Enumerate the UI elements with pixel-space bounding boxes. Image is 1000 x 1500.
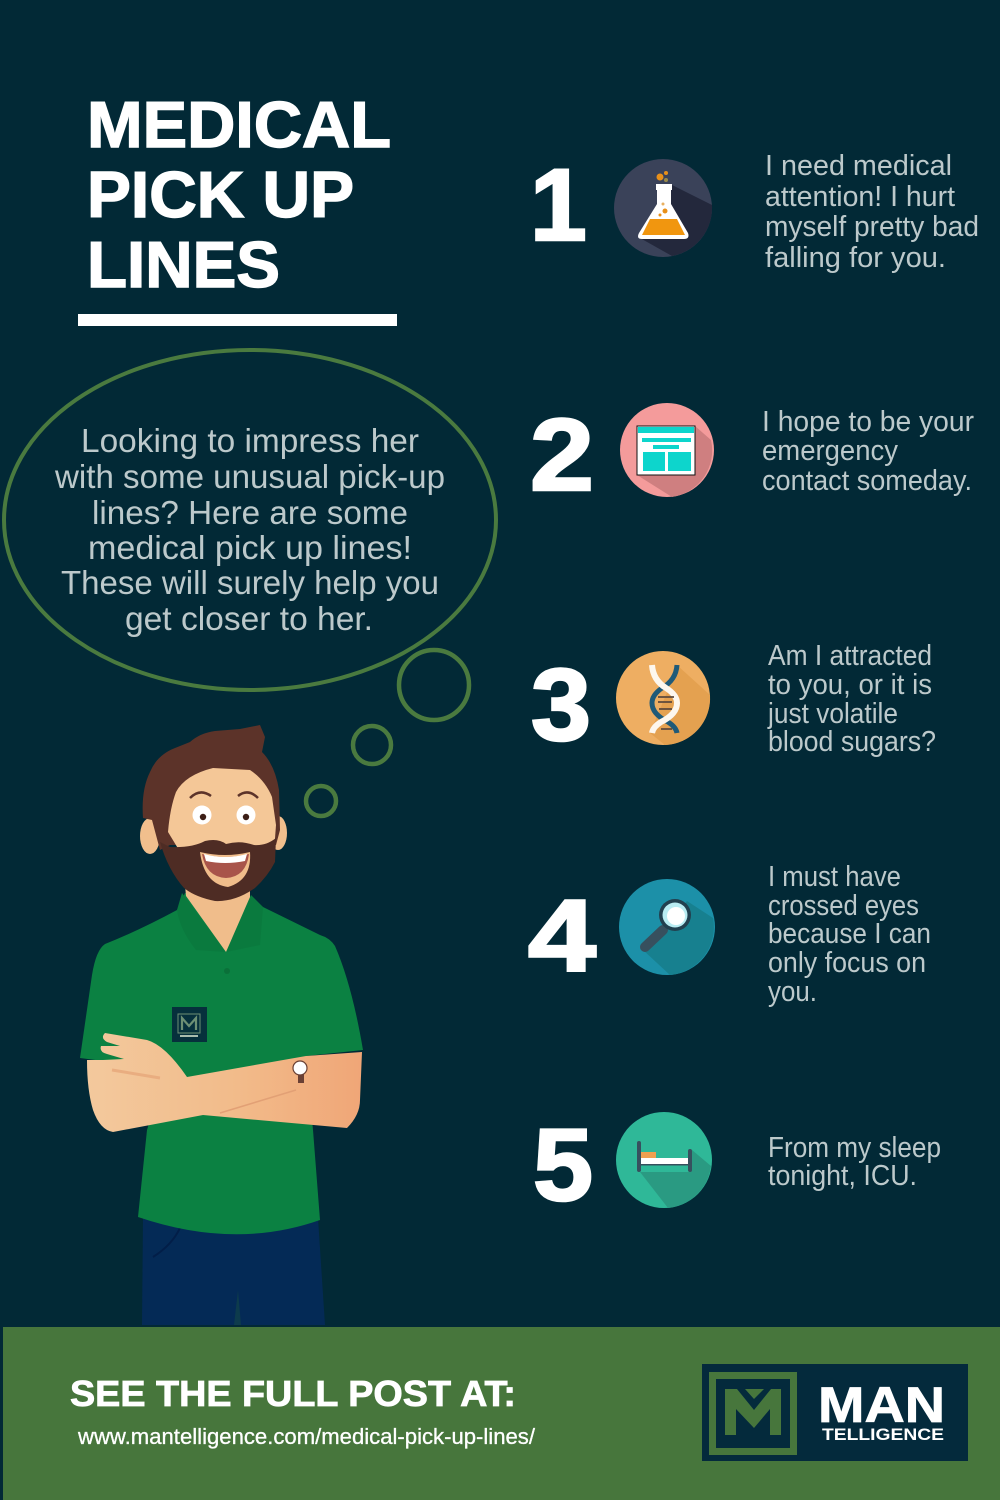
trousers [142, 1216, 325, 1325]
wristwatch [293, 1061, 307, 1083]
text: contact someday. [762, 465, 972, 497]
item 3 [531, 640, 936, 762]
thought bubble with intro text [4, 350, 496, 816]
shirt [80, 893, 363, 1234]
title: LINES [87, 228, 280, 301]
thought bubble with intro text: get closer to her. [125, 600, 373, 637]
icon: DNA helix [616, 651, 710, 745]
ears [140, 816, 287, 854]
text: only focus on [768, 947, 926, 979]
face [168, 768, 276, 880]
title underline [78, 314, 397, 326]
footer band [3, 1327, 1000, 1500]
text: I hope to be your [762, 406, 974, 438]
text: you. [768, 976, 817, 1008]
text: attention! I hurt [765, 181, 955, 213]
title [87, 88, 391, 301]
number 4: 4 [528, 879, 596, 993]
beard [160, 838, 276, 901]
text: Am I attracted [768, 640, 932, 672]
item 2 [530, 398, 974, 512]
logo [702, 1364, 968, 1461]
text: I must have [768, 861, 901, 893]
text: just volatile [767, 698, 898, 730]
hair [143, 725, 280, 850]
number 1: 1 [530, 148, 587, 262]
number 2: 2 [530, 398, 594, 512]
text: tonight, ICU. [768, 1160, 917, 1192]
text: I need medical [765, 150, 952, 182]
icon: flask [614, 159, 712, 257]
number 3: 3 [531, 648, 591, 762]
text [762, 406, 974, 497]
logo: TELLIGENCE [822, 1426, 944, 1444]
title: MEDICAL [87, 88, 391, 161]
neck [185, 880, 250, 952]
shirt badge [172, 1007, 207, 1042]
icon: hospital bed [616, 1112, 712, 1208]
text: From my sleep [768, 1132, 941, 1164]
text: myself pretty bad [765, 211, 979, 243]
number 5: 5 [533, 1108, 593, 1222]
item 4 [528, 861, 931, 1008]
eyes and brows [190, 792, 258, 824]
item 1 [530, 148, 979, 274]
text: falling for you. [765, 242, 946, 274]
logo: MAN [818, 1377, 945, 1433]
thought bubble with intro text: Looking to impress her [81, 422, 419, 459]
text [765, 150, 979, 274]
text: crossed eyes [768, 890, 919, 922]
footer url: www.mantelligence.com/medical-pick-up-lines/ [77, 1424, 536, 1449]
thought bubble with intro text: lines? Here are some [92, 494, 408, 531]
title: PICK UP [87, 158, 354, 231]
thought bubble with intro text: These will surely help you [61, 564, 439, 601]
footer heading: SEE THE FULL POST AT: [70, 1373, 516, 1414]
text: blood sugars? [768, 726, 936, 758]
text: because I can [768, 918, 931, 950]
icon: browser window [620, 403, 714, 497]
item 5 [533, 1108, 941, 1222]
character: bearded man in green shirt [80, 725, 363, 1325]
text [768, 861, 931, 1008]
text: emergency [762, 435, 898, 467]
icon: magnifying glass [619, 879, 715, 975]
mouth [200, 852, 250, 887]
text [768, 1132, 941, 1192]
crossed arms [87, 1033, 362, 1132]
text: to you, or it is [768, 669, 932, 701]
text [767, 640, 936, 758]
thought bubble with intro text: with some unusual pick-up [54, 458, 445, 495]
thought bubble with intro text: medical pick up lines! [88, 529, 412, 566]
